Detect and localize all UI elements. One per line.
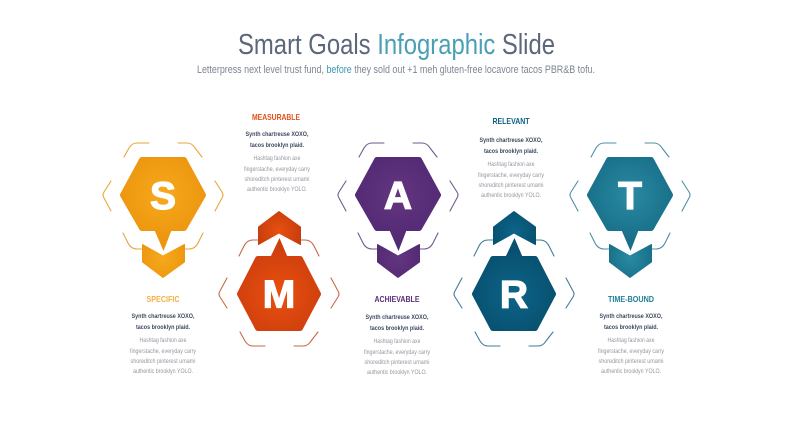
text: relevant: authentic brooklyn YOLO. (481, 192, 541, 199)
text: achievable: Synth chartreuse XOXO, (366, 314, 429, 321)
hexagon: M (240, 238, 318, 328)
badge: R (454, 212, 574, 346)
tab: S (142, 244, 184, 278)
text: measurable (244, 113, 311, 193)
hexagon: A (358, 160, 438, 251)
text: achievable: fingerstache, everyday carry (364, 349, 431, 356)
text: relevant: Hashtag fashion axe (488, 161, 535, 168)
text: time-bound: Hashtag fashion axe (608, 337, 655, 344)
letter: A: A (384, 175, 412, 218)
badge: M (219, 212, 339, 346)
hexagon: S (123, 160, 203, 251)
text: time-bound (598, 295, 665, 375)
text: measurable: Synth chartreuse XOXO, (246, 131, 309, 138)
text: specific (130, 295, 197, 375)
outline arcs: T (570, 143, 690, 249)
text: time-bound: fingerstache, everyday carry (598, 348, 665, 355)
title: Smart Goals Infographic Slide (238, 29, 555, 61)
subtitle: Letterpress next level trust fund, before they sold out +1 meh gluten-free locavore tacos PBR&B tofu. (197, 64, 595, 76)
hexagon: R (475, 238, 553, 328)
text: achievable (364, 295, 431, 376)
text: achievable: tacos brooklyn plaid. (370, 325, 424, 332)
hexagon: T (590, 160, 670, 251)
text: relevant: RELEVANT (492, 117, 530, 126)
outline arcs: R (454, 240, 574, 346)
badge: S (103, 143, 223, 278)
outline arcs: A (338, 143, 458, 249)
text: specific: authentic brooklyn YOLO. (133, 368, 193, 375)
text: achievable: ACHIEVABLE (374, 295, 420, 304)
letter: T: T (618, 175, 642, 218)
text: measurable: fingerstache, everyday carry (244, 166, 311, 173)
text: specific: tacos brooklyn plaid. (136, 324, 190, 331)
tab: A (378, 244, 420, 278)
text: specific: Hashtag fashion axe (140, 337, 187, 344)
letter: M: M (263, 274, 295, 316)
text: relevant: Synth chartreuse XOXO, (480, 137, 543, 144)
text: measurable: Hashtag fashion axe (254, 155, 301, 162)
text: measurable: MEASURABLE (252, 113, 300, 122)
text: measurable: authentic brooklyn YOLO. (247, 186, 307, 193)
tab: R (494, 212, 536, 244)
text: achievable: authentic brooklyn YOLO. (367, 369, 427, 376)
text: specific: fingerstache, everyday carry (130, 348, 197, 355)
badge: A (338, 143, 458, 278)
text: achievable: shoreditch pinterest umami (364, 359, 430, 366)
text: measurable: shoreditch pinterest umami (244, 176, 310, 183)
text: time-bound: shoreditch pinterest umami (598, 358, 664, 365)
tab: T (610, 244, 652, 278)
text: time-bound: tacos brooklyn plaid. (604, 324, 658, 331)
text: achievable: Hashtag fashion axe (374, 338, 421, 345)
text: time-bound: authentic brooklyn YOLO. (601, 368, 661, 375)
text: relevant: shoreditch pinterest umami (478, 182, 544, 189)
text: relevant: tacos brooklyn plaid. (484, 148, 538, 155)
text: specific: Synth chartreuse XOXO, (132, 313, 195, 320)
text: relevant: fingerstache, everyday carry (478, 172, 545, 179)
text: relevant (478, 117, 545, 199)
letter: R: R (500, 274, 528, 316)
text: time-bound: Synth chartreuse XOXO, (600, 313, 663, 320)
tab: M (258, 212, 300, 244)
text: time-bound: TIME-BOUND (608, 295, 654, 304)
badge: T (570, 143, 690, 278)
letter: S: S (150, 175, 176, 218)
text: specific: shoreditch pinterest umami (130, 358, 196, 365)
outline arcs: M (219, 240, 339, 346)
text: specific: SPECIFIC (146, 295, 180, 304)
outline arcs: S (103, 143, 223, 249)
text: measurable: tacos brooklyn plaid. (250, 142, 304, 149)
